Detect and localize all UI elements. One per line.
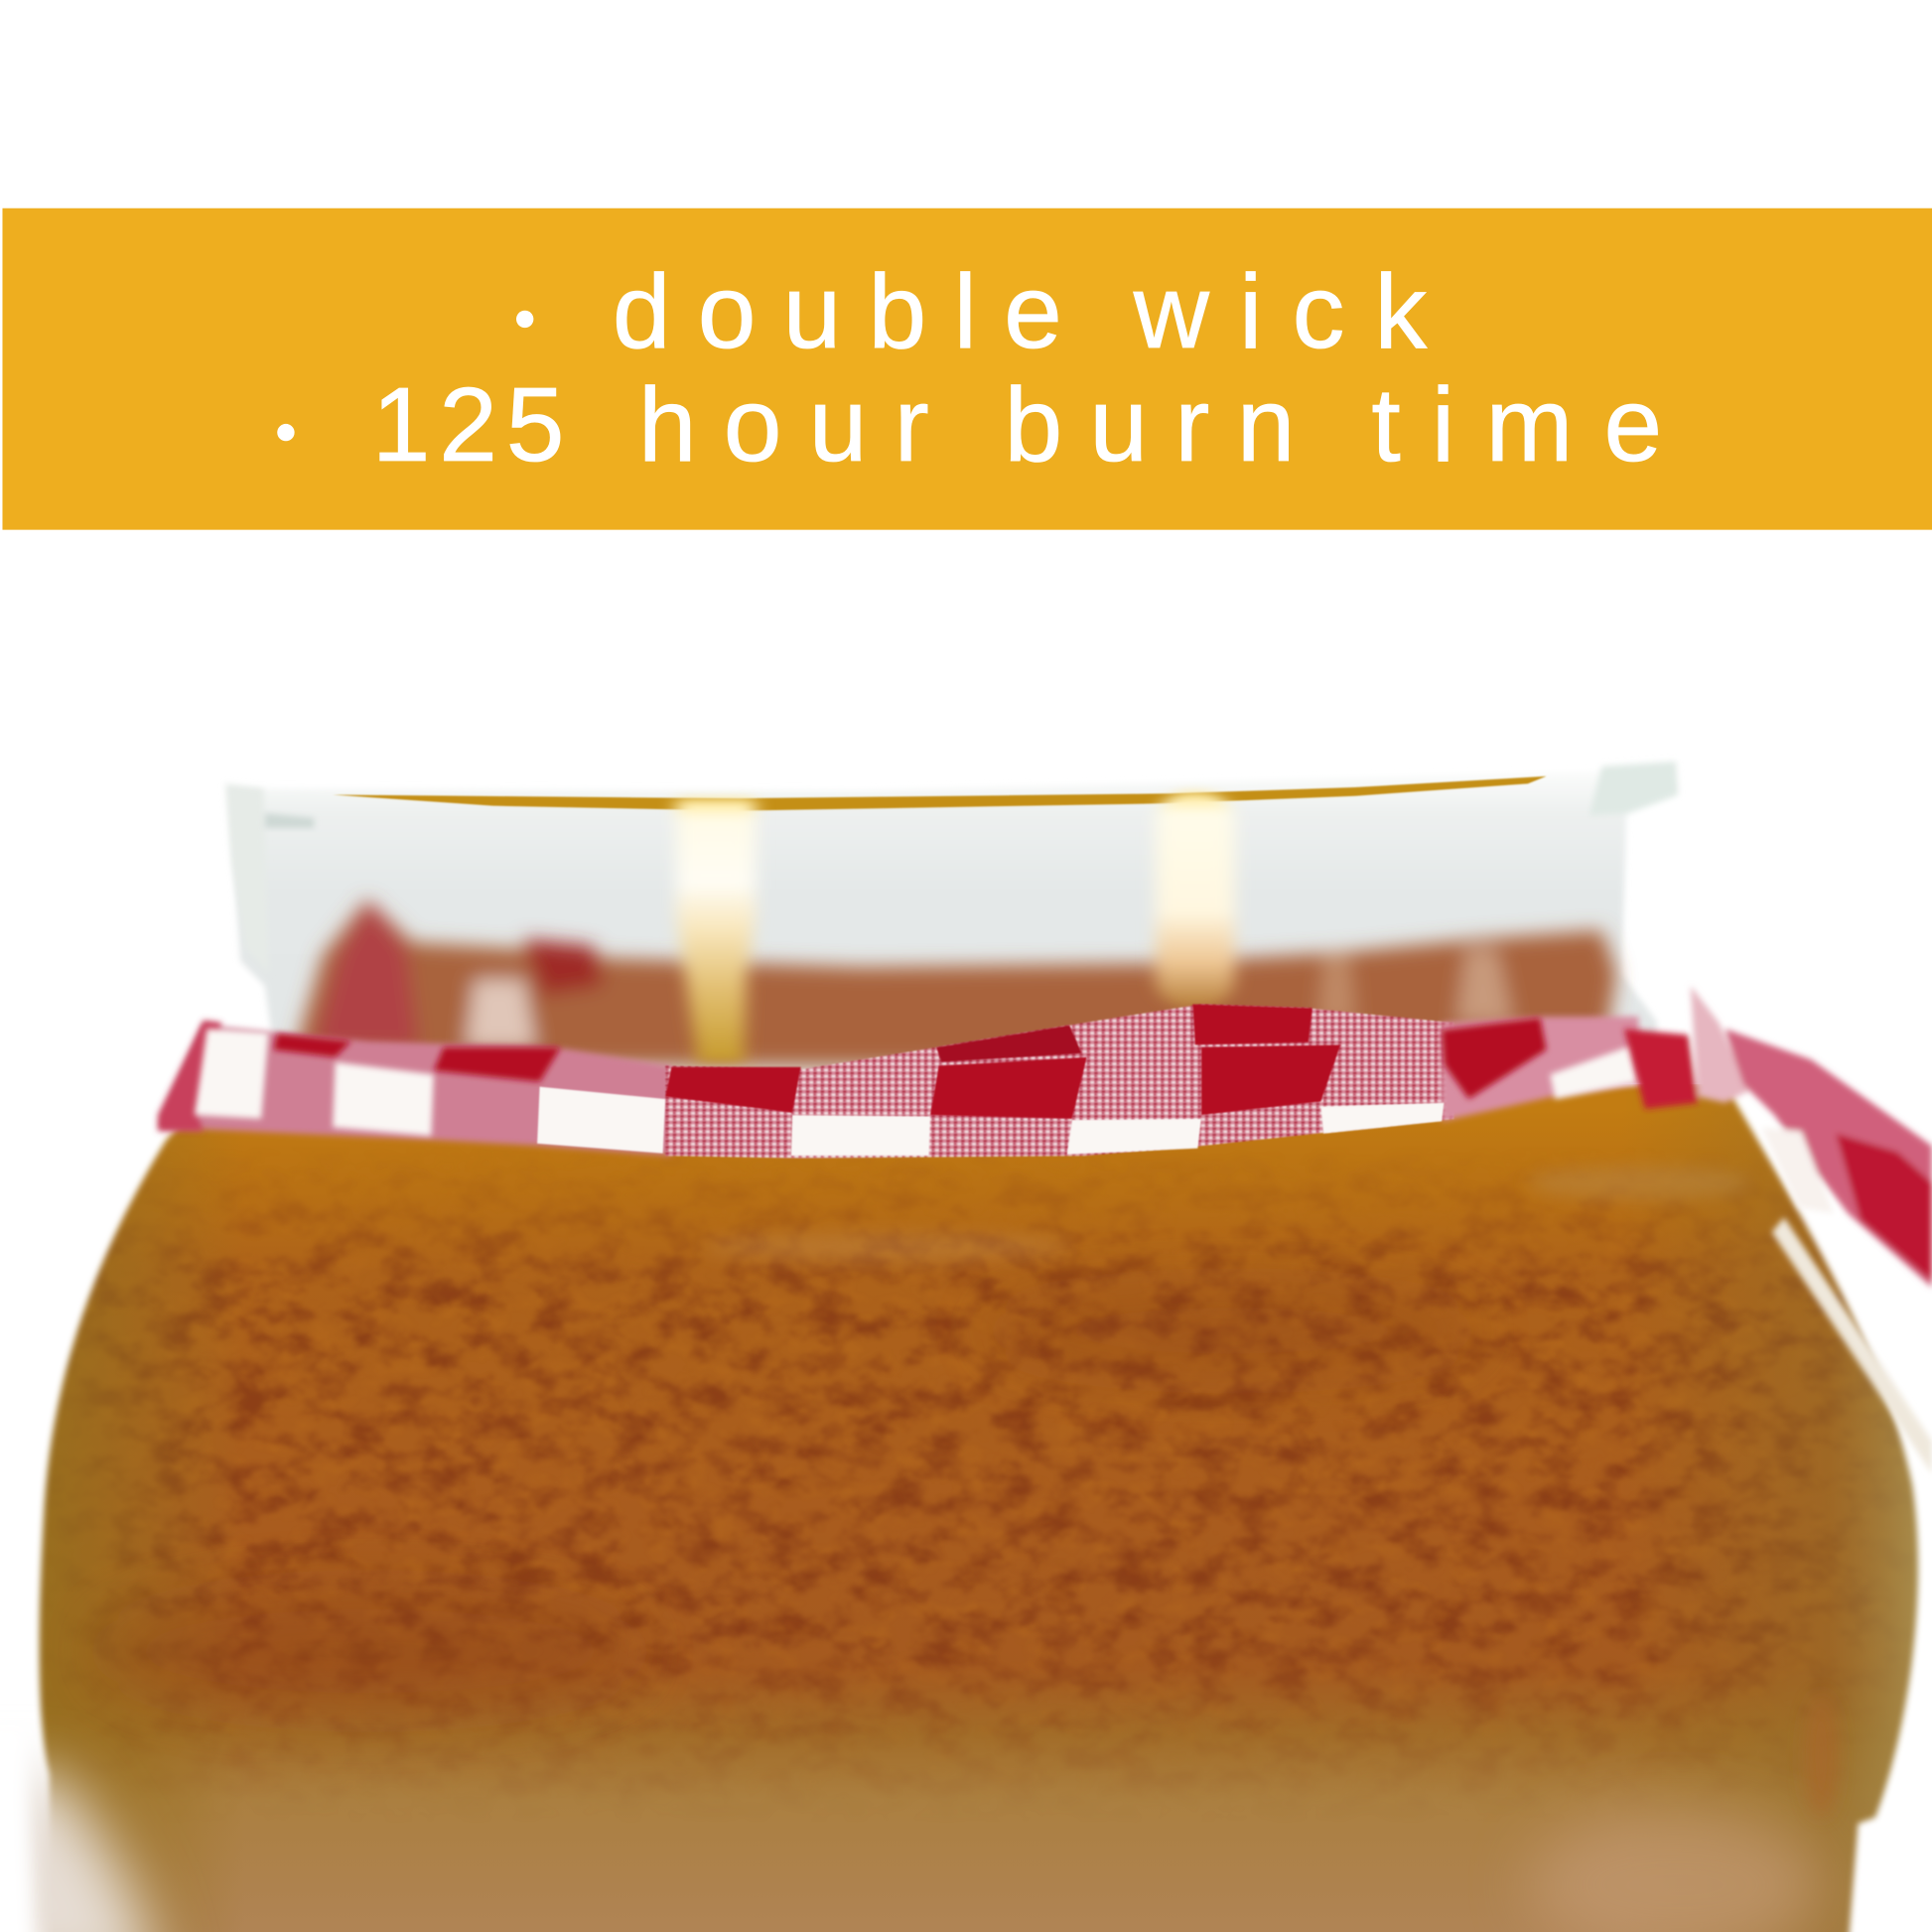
candle jar photo: [0, 761, 1932, 1932]
red squares: [274, 1004, 1547, 1119]
white fade at far left: [0, 1725, 37, 1932]
feature: 125 hour burn time: time: [1371, 367, 1662, 483]
feature: double wick: [516, 254, 1427, 370]
feature: double wick: wick: [1133, 254, 1427, 370]
wax body: [0, 1084, 1932, 1932]
feature: 125 hour burn time: [277, 367, 1662, 483]
wick flames: [676, 792, 1235, 1062]
banner: [2, 208, 1932, 530]
feature: 125 hour burn time: burn: [1004, 367, 1295, 483]
amber rim reflection: [333, 776, 1547, 811]
ribbon base weave: [160, 1004, 1639, 1159]
wax seen through glass: [296, 899, 1616, 1066]
white squares: [195, 1029, 1639, 1156]
glass highlight right side: [1772, 1217, 1932, 1473]
darker patches: [1066, 1301, 1387, 1359]
flame: left wick: [676, 798, 756, 1062]
pale lower-left glass edge: [0, 1774, 160, 1932]
feature: double wick: double: [613, 254, 1062, 370]
banner background: [2, 208, 1932, 530]
ribbon knot and tail: [1624, 986, 1932, 1288]
gingham ribbon: [158, 986, 1932, 1288]
glass jar neck: [225, 761, 1678, 1072]
feature: 125 hour burn time: hour: [638, 367, 929, 483]
flame: right wick: [1156, 792, 1235, 1009]
feature: 125 hour burn time: 125: [372, 367, 564, 483]
ribbon left end: [158, 1021, 221, 1131]
